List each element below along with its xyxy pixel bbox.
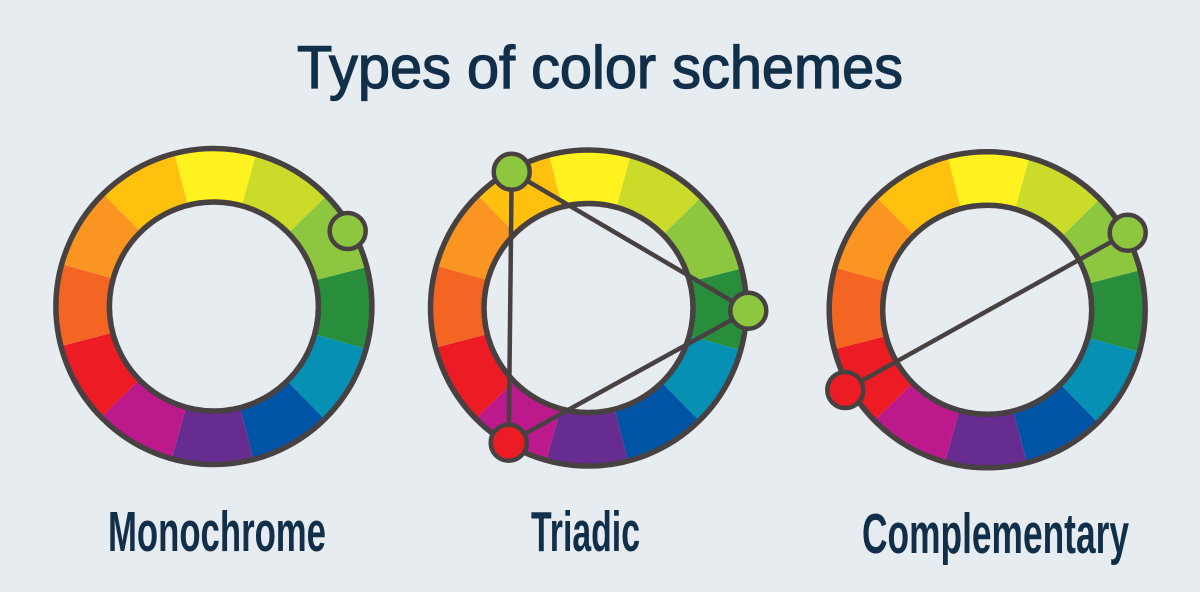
marker: red node bbox=[827, 372, 863, 408]
triangle connecting lines bbox=[509, 172, 748, 443]
marker: green node bbox=[330, 213, 366, 249]
color wheel: complementary bbox=[828, 150, 1147, 469]
color wheel: triadic bbox=[429, 149, 748, 467]
panel: complementary wheel bbox=[827, 150, 1147, 469]
color wheel: monochrome bbox=[55, 147, 373, 466]
panel: triadic wheel bbox=[429, 149, 766, 467]
label: Triadic: Triadic bbox=[531, 500, 640, 564]
title: Types of color schemes bbox=[297, 34, 903, 101]
marker: bottom red node bbox=[491, 425, 527, 461]
marker: right green node bbox=[730, 293, 766, 329]
marker: green node bbox=[1110, 215, 1146, 251]
label: Monochrome: Monochrome bbox=[108, 500, 326, 564]
complementary connecting line bbox=[845, 233, 1128, 390]
panel: monochrome wheel bbox=[55, 147, 373, 466]
marker: top green node bbox=[494, 154, 530, 190]
